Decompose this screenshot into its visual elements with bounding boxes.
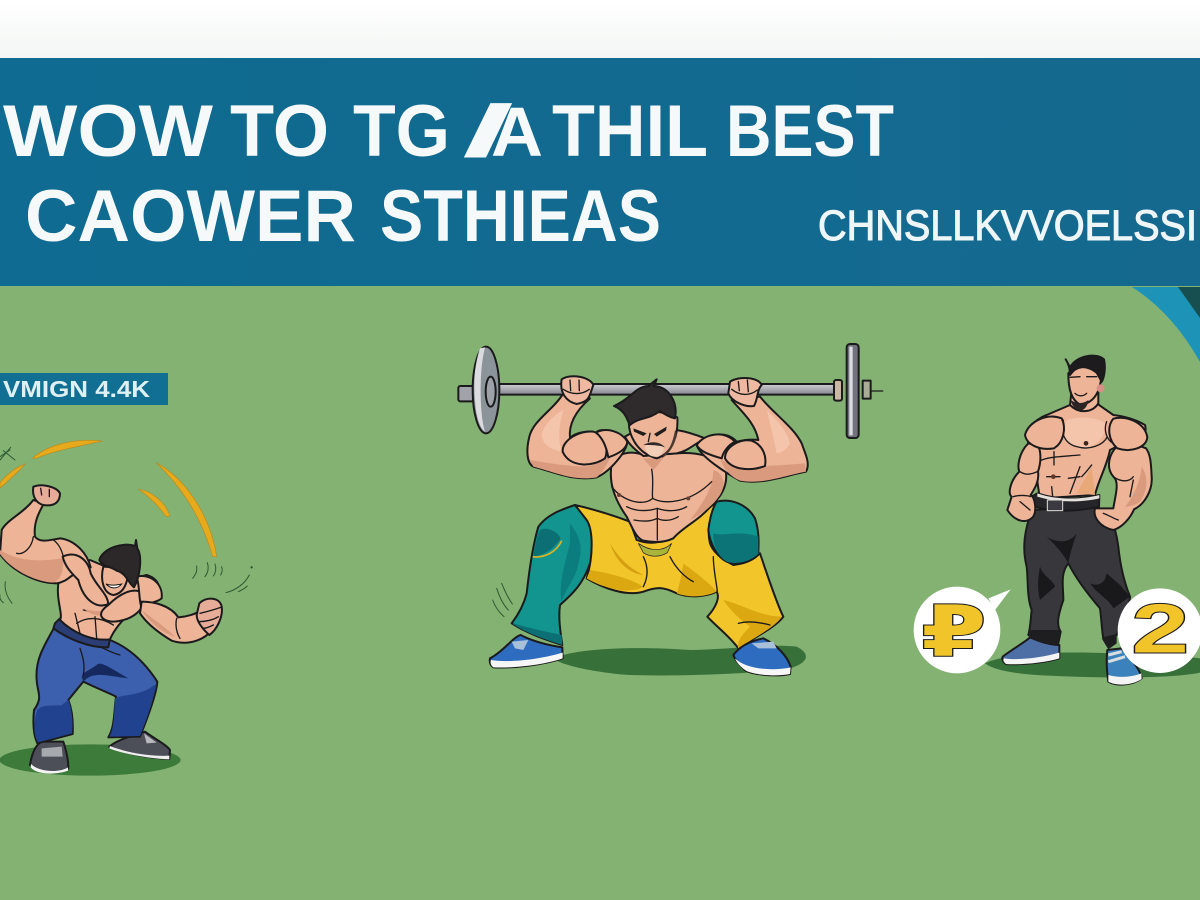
- right shoe: [1107, 648, 1142, 685]
- speech bubble 1: [914, 587, 1011, 673]
- label banner: [0, 373, 168, 405]
- speech bubble 2: 2: [1132, 590, 1189, 668]
- barbell: [458, 344, 883, 438]
- background: [0, 286, 1200, 900]
- title: THIL: [552, 91, 708, 172]
- torso: [611, 453, 726, 542]
- right hand: [728, 378, 762, 406]
- speech bubble 2: [1118, 588, 1200, 673]
- left shoe: [1002, 637, 1059, 664]
- title: STHIEAS: [380, 176, 661, 257]
- left pant leg: [512, 505, 594, 645]
- belt: [1032, 493, 1099, 511]
- figure: center man squatting with barbell: [458, 344, 883, 675]
- speech bubble 1: ₽: [921, 591, 986, 673]
- pants: [1024, 507, 1130, 649]
- corner accent: [1132, 287, 1200, 362]
- title: /: [462, 91, 514, 172]
- ground shadow: [553, 646, 806, 675]
- title: BEST: [726, 91, 894, 172]
- belt waistband: [53, 618, 110, 647]
- title: TO: [230, 91, 329, 172]
- right knee teal: [708, 501, 759, 563]
- ground shadow: [985, 653, 1200, 677]
- top white strip: [0, 0, 1200, 58]
- left hand: [561, 376, 593, 404]
- motion arcs: [0, 440, 253, 603]
- yellow pants: [575, 502, 783, 648]
- head: [614, 379, 677, 458]
- title: TG: [353, 91, 450, 172]
- motion lines: [493, 583, 512, 617]
- figure: left muscular man flexing: [0, 440, 253, 776]
- left shoe: [490, 635, 563, 668]
- neck and head: [1066, 356, 1105, 411]
- header band: [0, 58, 1200, 286]
- right arm: [697, 397, 808, 482]
- torso: [1028, 403, 1146, 498]
- figure: right man standing: [914, 356, 1200, 685]
- front arm and fist: [140, 599, 222, 643]
- right arm: [1025, 417, 1152, 530]
- ground shadow: [0, 744, 181, 776]
- raised arm: [0, 485, 108, 605]
- title: WOW: [3, 91, 213, 172]
- head: [99, 540, 140, 595]
- left arm: [527, 393, 627, 478]
- right shoe: [109, 732, 170, 759]
- title: A: [491, 93, 543, 171]
- jeans: [33, 623, 157, 743]
- left shoe: [30, 742, 68, 774]
- torso: [58, 560, 162, 640]
- label banner: VMIGN 4.4K: [3, 376, 150, 402]
- right shoe: [733, 638, 791, 675]
- title: [3, 91, 894, 257]
- title: CAOWER: [25, 176, 356, 257]
- traps: [625, 430, 705, 456]
- left arm: [1007, 443, 1040, 521]
